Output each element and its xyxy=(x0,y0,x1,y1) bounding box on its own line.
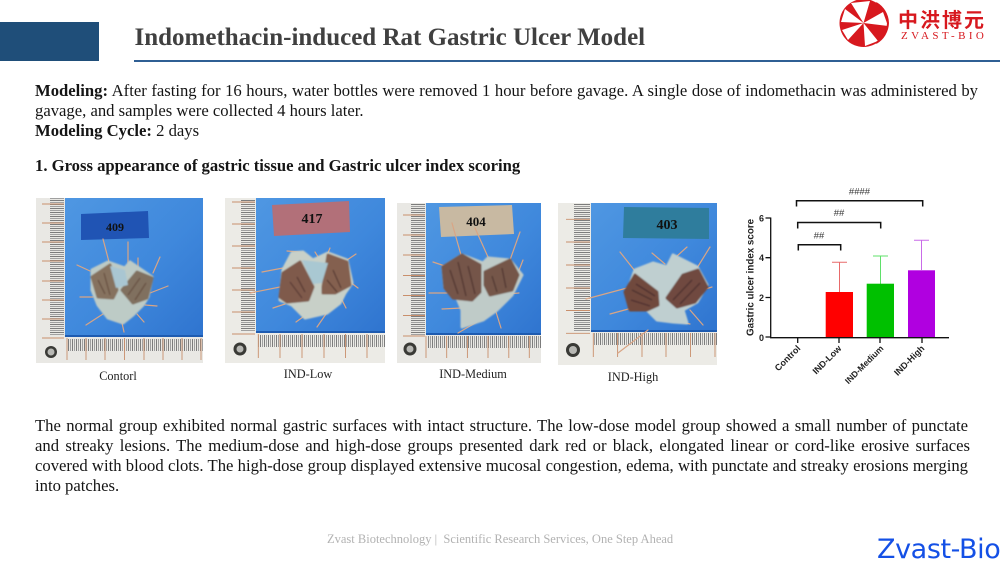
stomach tissue xyxy=(625,255,707,323)
photo: IND-Medium stomach 404 xyxy=(397,203,541,363)
description paragraph: The normal group exhibited normal gastric surfaces with intact structure. The low-dose model group showed a small number of punctate xyxy=(35,416,968,435)
specimen label 417 xyxy=(272,201,350,236)
significance brackets: ## xyxy=(814,230,825,242)
axis tick labels: IND-High xyxy=(892,343,926,378)
specimen label 404 xyxy=(439,205,514,237)
axis tick labels: Control xyxy=(773,343,802,373)
specimen label 409: 409 xyxy=(106,220,124,234)
axis tick labels: 0 xyxy=(759,333,764,343)
header blue block xyxy=(0,22,99,61)
description paragraph: into patches. xyxy=(35,476,119,495)
description paragraph xyxy=(35,416,970,495)
caption Contorl: Contorl xyxy=(99,369,137,383)
axis tick labels xyxy=(759,214,926,386)
caption IND-High: IND-High xyxy=(608,370,658,384)
specimen label 404: 404 xyxy=(466,214,486,229)
specimen label 417: 417 xyxy=(302,212,322,227)
caption IND-Medium: IND-Medium xyxy=(439,367,507,381)
significance brackets: #### xyxy=(849,186,871,198)
description paragraph: and streaky lesions. The medium-dose and high-dose groups presented dark red or black, elongated linear or cord-like erosive surfaces xyxy=(35,436,970,455)
stomach tissue xyxy=(280,252,352,318)
bars with error bars xyxy=(826,240,935,337)
caption IND-Low: IND-Low xyxy=(284,367,332,381)
logo English name: ZVAST-BIO xyxy=(901,30,987,42)
axis tick labels: 6 xyxy=(759,214,764,224)
modeling text block: Modeling Cycle: 2 days xyxy=(35,121,199,140)
logo Chinese name: 中洪博元 xyxy=(898,4,986,33)
pins xyxy=(250,248,358,327)
axis tick labels: IND-Low xyxy=(811,343,844,376)
section heading: 1. Gross appearance of gastric tissue and Gastric ulcer index scoring xyxy=(35,156,520,175)
pins xyxy=(429,223,523,333)
significance brackets xyxy=(796,186,923,250)
pins xyxy=(586,247,712,353)
specimen label 403: 403 xyxy=(656,218,678,233)
axis tick labels: 2 xyxy=(759,293,764,303)
logo: Zvast umbrella with company name xyxy=(840,0,987,47)
stomach tissue xyxy=(92,262,152,323)
axes and ticks xyxy=(766,218,949,343)
modeling text block xyxy=(35,81,978,140)
photo: IND-Low stomach 417 xyxy=(225,198,385,363)
axis tick labels: IND-Medium xyxy=(843,343,886,386)
significance brackets: ## xyxy=(834,208,845,219)
bar chart: gastric ulcer index score xyxy=(746,186,949,386)
axis tick labels: 4 xyxy=(759,253,764,263)
stomach tissue xyxy=(443,255,522,327)
specimen label 409 xyxy=(81,211,149,240)
y axis title: Gastric ulcer index score xyxy=(746,218,756,336)
description paragraph: covered with blood clots. The high-dose group displayed extensive mucosal congestion, edema, with punctate and streaky erosions merging xyxy=(35,456,968,475)
specimen label 403 xyxy=(623,207,709,239)
modeling text block: Modeling: After fasting for 16 hours, water bottles were removed 1 hour before gavage. A single dose of indomethacin was administered by xyxy=(35,81,978,100)
title: Indomethacin-induced Rat Gastric Ulcer Model xyxy=(134,24,645,51)
photo: IND-High stomach 403 xyxy=(558,203,717,365)
photo: Control stomach 409 xyxy=(36,198,203,363)
modeling text block: gavage, and samples were collected 4 hours later. xyxy=(35,101,364,120)
pins xyxy=(77,239,168,332)
footer slogan: Zvast Biotechnology | Scientific Research Services, One Step Ahead xyxy=(327,532,673,546)
